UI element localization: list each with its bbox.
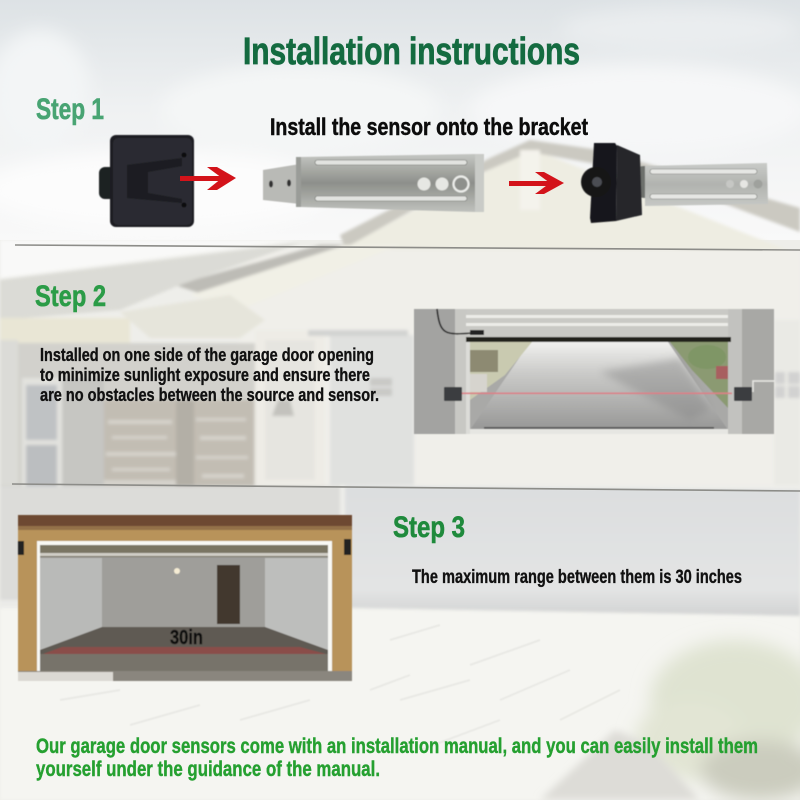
lower left roof and wall (0, 243, 300, 320)
text: placement instructions: to minimize sunlight exposure and ensure there (40, 365, 370, 385)
divider line (15, 245, 800, 250)
heading: step 3: Step 3 (393, 511, 465, 544)
lower garage wall band (0, 486, 340, 610)
photo: open garage (18, 515, 352, 681)
heading: step 1: Step 1 (36, 93, 104, 126)
icon: bracket (263, 154, 484, 212)
heading: step 2: Step 2 (35, 280, 106, 313)
text: placement instructions: are no obstacles between the source and sensor. (40, 385, 379, 405)
divider line (12, 484, 800, 491)
text: closing note (36, 735, 758, 781)
icon: sensor (99, 135, 194, 227)
main gable (250, 148, 800, 300)
label: 30in: 30in (170, 627, 203, 649)
text: placement instructions (40, 345, 379, 405)
icon: sensor mounted on bracket (581, 143, 768, 223)
driveway (0, 608, 800, 800)
arrow: sensor to bracket (180, 167, 236, 190)
text: install the sensor onto the bracket: Install the sensor onto the bracket (270, 114, 588, 141)
title: Installation instructions (243, 31, 580, 73)
arrow: bracket to assembly (509, 172, 564, 194)
text: placement instructions: Installed on one side of the garage door opening (40, 345, 374, 365)
text: closing note: yourself under the guidance of the manual. (36, 758, 380, 781)
photo: garage door opening with beam (414, 309, 774, 434)
